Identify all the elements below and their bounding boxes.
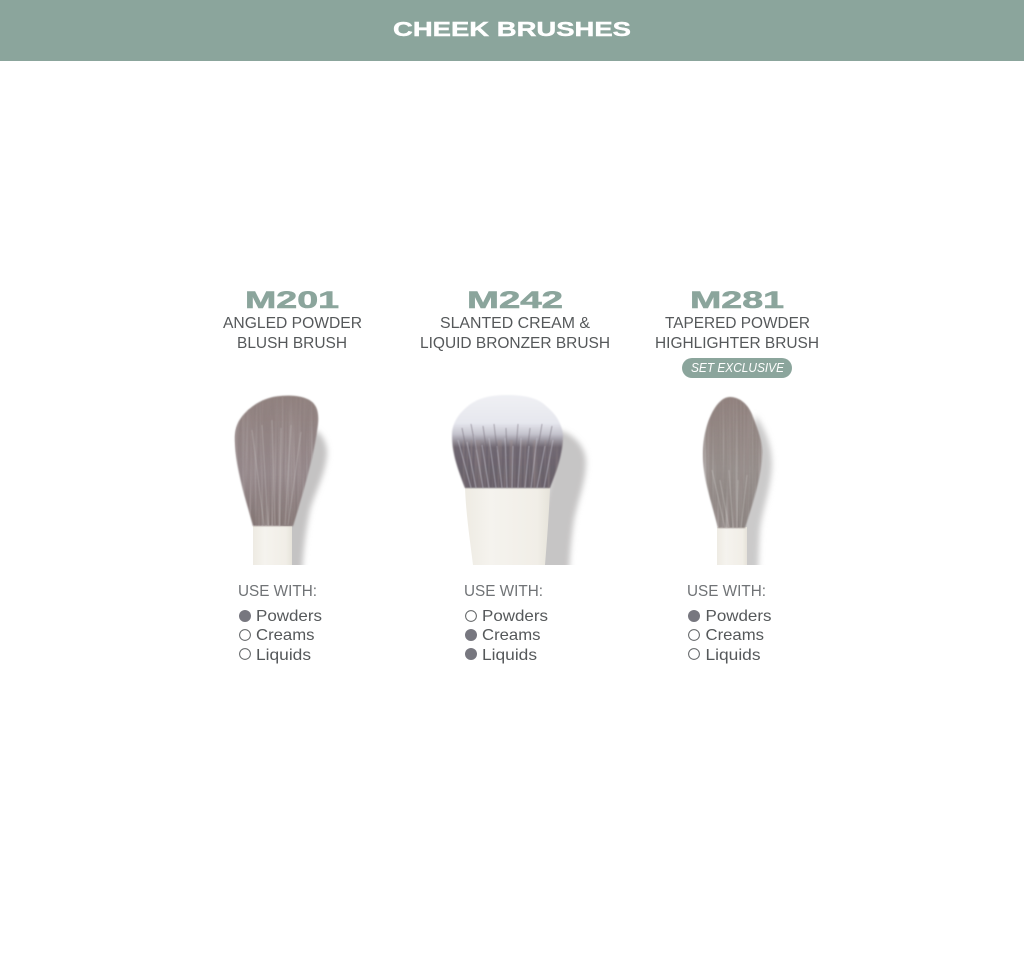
set exclusive badge	[682, 358, 792, 378]
set exclusive badge: SET EXCLUSIVE	[691, 361, 785, 375]
use with list: USE WITH:	[464, 583, 543, 600]
header band	[0, 0, 1024, 61]
use with list	[464, 583, 548, 664]
M242 heading: M242	[467, 287, 563, 314]
M281 name	[655, 315, 819, 352]
M201 name	[223, 315, 362, 352]
M201 name: ANGLED POWDER	[223, 315, 362, 332]
panel: M242 brush	[420, 287, 610, 664]
use with list: Creams	[256, 627, 314, 644]
panel: M201 brush	[223, 287, 362, 664]
use with list: USE WITH:	[687, 583, 766, 600]
icon: slanted cream and liquid bronzer brush	[450, 395, 586, 575]
M201 name: BLUSH BRUSH	[237, 335, 347, 352]
panel: M281 brush	[655, 287, 819, 664]
use with list	[238, 583, 322, 664]
use with list: USE WITH:	[238, 583, 317, 600]
M242 name	[420, 315, 610, 352]
use with list: Powders	[482, 608, 548, 625]
use with list: Liquids	[706, 647, 760, 664]
use with list: Creams	[706, 627, 764, 644]
M281 name: HIGHLIGHTER BRUSH	[655, 335, 819, 352]
M242 name: SLANTED CREAM &	[440, 315, 590, 332]
icon: tapered powder highlighter brush	[700, 395, 772, 580]
M281 heading: M281	[690, 287, 784, 314]
M281 name: TAPERED POWDER	[665, 315, 810, 332]
use with list: Powders	[256, 608, 322, 625]
M242 name: LIQUID BRONZER BRUSH	[420, 335, 610, 352]
icon: angled powder blush brush	[232, 392, 327, 580]
M201 heading: M201	[245, 287, 339, 314]
use with list: Liquids	[256, 647, 311, 664]
use with list: Creams	[482, 627, 540, 644]
use with list	[687, 583, 772, 664]
use with list: Liquids	[482, 647, 537, 664]
use with list: Powders	[706, 608, 772, 625]
title: CHEEK BRUSHES	[393, 19, 631, 41]
